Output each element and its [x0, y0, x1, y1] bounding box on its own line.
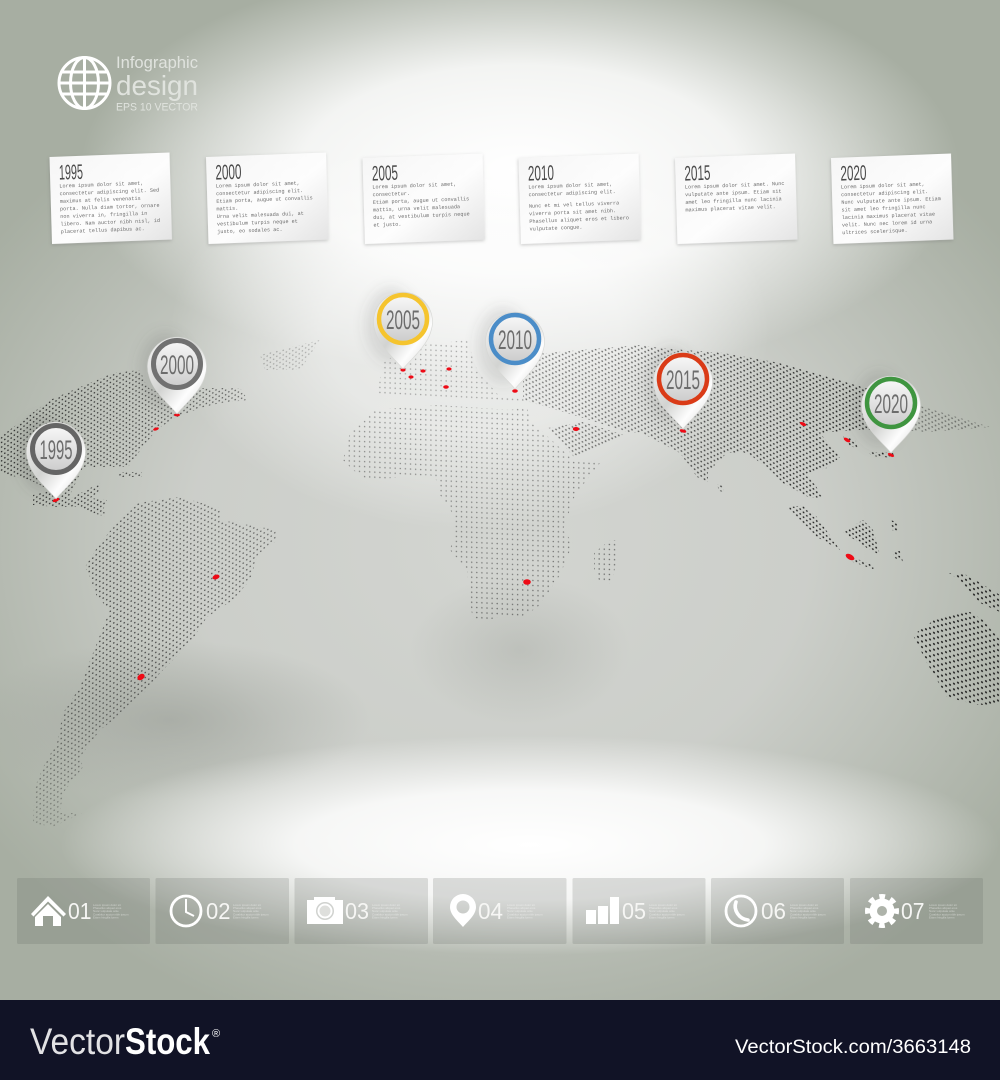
Oceania: [913, 573, 1000, 705]
note: 2005: mattis, urna velit malesuada: [373, 204, 460, 213]
note: 2020: ultrices scelerisque.: [842, 228, 908, 236]
icon: bar chart: [586, 897, 619, 924]
note: 2000: 2000: [215, 161, 242, 185]
logo text: Infographic: [116, 53, 198, 72]
tile 07: settings: Etiam fringilla lorem: [929, 915, 955, 919]
note: 2020: velit. Nunc nec lorem id urna: [842, 219, 932, 229]
map pins: [18, 287, 920, 499]
note: 2005: 2005: [372, 162, 398, 186]
tile 02: clock: Phasellus aliquet eros: [233, 906, 262, 910]
Far east Siberia: [912, 406, 990, 432]
note: 2000: Lorem ipsum dolor sit amet,: [216, 181, 300, 190]
note: 2010: Phasellus aliquet eros et libero: [529, 215, 629, 225]
pin: 1995: [18, 417, 86, 499]
Asia: [523, 345, 900, 498]
note: 1995: Lorem ipsum dolor sit amet,: [59, 181, 143, 190]
VectorStock logo: [30, 1021, 220, 1062]
note: 2010: vulputate congue.: [529, 225, 583, 233]
note: 2005: Lorem ipsum dolor sit amet,: [372, 182, 456, 191]
tile 03: camera: Lorem ipsum dolor sit: [372, 903, 400, 907]
Madagascar: [594, 540, 616, 580]
tile 06: phone: [711, 878, 844, 944]
note: 2005: et justo.: [373, 222, 402, 229]
tile 02: clock: Lorem ipsum dolor sit: [233, 903, 261, 907]
note: 2005: [362, 154, 485, 244]
pin: 1995: 1995: [40, 435, 72, 465]
Africa: [343, 405, 600, 620]
note: 2005: Etiam porta, augue ut convallis: [373, 196, 469, 206]
tile 03: camera: 03: [345, 898, 369, 924]
tile 06: phone: Lorem ipsum dolor sit: [790, 903, 818, 907]
tile 03: camera: Nunc vulputate ante: [372, 909, 398, 913]
South America: [33, 497, 277, 827]
pin: 2015: [645, 347, 712, 429]
note: 2000: justo, eo sodales ac.: [217, 227, 283, 235]
note: 1995: non viverra in, fringilla in: [60, 211, 147, 220]
timeline notes: [50, 152, 953, 244]
note: 2020: sit amet leo fringilla nunc: [841, 204, 926, 213]
logo text: design: [116, 70, 198, 101]
note: 2020: [831, 154, 953, 244]
note: 1995: libero. Nam auctor nibh nisl, id: [60, 218, 160, 228]
tile 06: phone: 06: [761, 898, 786, 924]
tile 05: bars: Phasellus aliquet eros: [649, 906, 678, 910]
note: 1995: placerat tellus dapibus ac.: [61, 226, 145, 235]
tile 04: location pin: Phasellus aliquet eros: [507, 906, 536, 910]
note: 2015: maximus placerat vitae velit.: [685, 204, 776, 213]
VectorStock logo: Vector: [30, 1021, 125, 1062]
footer watermark: [30, 1021, 971, 1062]
note: 2015: 2015: [684, 162, 711, 186]
pin: 2010: 2010: [498, 325, 532, 355]
tile 06: phone: Curabitur auctor nibh ipsum: [790, 912, 826, 916]
note: 1995: porta. Nulla diam tortor, ornare: [60, 203, 160, 212]
tile 02: clock: [156, 878, 289, 944]
note: 2000: mattis.: [216, 206, 238, 212]
note: 1995: maximus at felis venenatis: [60, 196, 141, 205]
tile 01: home: Nunc vulputate ante: [93, 909, 119, 913]
Europe: [377, 340, 525, 403]
location markers: [52, 367, 895, 682]
note: 2010: 2010: [528, 162, 554, 186]
tile 07: settings: Curabitur auctor nibh ipsum: [929, 912, 965, 916]
tile 01: home: [17, 878, 150, 944]
note: 2010: consectetur adipiscing elit.: [529, 189, 616, 198]
icon: camera: [307, 897, 343, 924]
note: 2015: [675, 154, 797, 244]
note: 2000: Urna velit malesuada dui, at: [217, 211, 304, 220]
tile 05: bars: 05: [622, 898, 646, 924]
North America: [0, 340, 320, 517]
note: 2020: 2020: [840, 162, 867, 186]
tile 07: settings: 07: [901, 898, 924, 924]
note: 2005: dui, at vestibulum turpis neque: [373, 211, 470, 221]
tile 01: home: Curabitur auctor nibh ipsum: [93, 912, 129, 916]
tile 01: home: Lorem ipsum dolor sit: [93, 903, 121, 907]
icon: clock: [171, 896, 201, 926]
Caribbean: [118, 472, 142, 477]
note: 2000: consectetur adipiscing elit.: [216, 188, 303, 197]
note: 2000: [206, 152, 329, 244]
pin: 2005: [365, 287, 432, 369]
icon: house: [31, 896, 66, 926]
pin: 2020: [853, 371, 920, 453]
dotted world map: [0, 340, 1000, 827]
pin: 2000: [139, 332, 206, 414]
tile 04: location pin: Nunc vulputate ante: [507, 909, 533, 913]
tile 02: clock: Curabitur auctor nibh ipsum: [233, 912, 269, 916]
image id: VectorStock.com/3663148: [735, 1037, 971, 1058]
bottom icon tiles: [17, 878, 983, 944]
note: 2020: Lorem ipsum dolor sit amet,: [841, 182, 925, 191]
note: 2020: lacinia maximus placerat vitae: [842, 212, 935, 221]
tile 04: location pin: Curabitur auctor nibh ipsum: [507, 912, 543, 916]
tile 05: bars: Curabitur auctor nibh ipsum: [649, 912, 685, 916]
icon: gear: [868, 897, 896, 925]
tile 07: settings: [850, 878, 983, 944]
tile 04: location pin: 04: [478, 898, 503, 924]
note: 2010: [518, 154, 641, 244]
tile 01: home: 01: [68, 898, 92, 924]
tile 01: home: Etiam fringilla lorem: [93, 915, 119, 919]
note: 1995: consectetur adipiscing elit. Sed: [60, 188, 159, 197]
note: 2000: Etiam porta, augue ut convallis: [216, 195, 313, 205]
pin: 2000: 2000: [160, 350, 194, 380]
Arabia: [548, 422, 624, 458]
note: 2000: vestibulum turpis neque et: [217, 219, 298, 228]
tile 03: camera: Phasellus aliquet eros: [372, 906, 401, 910]
tile 07: settings: Phasellus aliquet eros: [929, 906, 958, 910]
VectorStock logo: ®: [212, 1028, 220, 1040]
tile 07: settings: Lorem ipsum dolor sit: [929, 903, 957, 907]
note: 2015: Lorem ipsum dolor sit amet. Nunc: [685, 181, 785, 191]
tile 01: home: Phasellus aliquet eros: [93, 906, 122, 910]
VectorStock logo: Stock: [125, 1021, 210, 1062]
tile 03: camera: Etiam fringilla lorem: [372, 915, 398, 919]
note: 2020: consectetur adipiscing elit.: [841, 189, 928, 198]
tile 06: phone: Etiam fringilla lorem: [790, 915, 816, 919]
tile 02: clock: Etiam fringilla lorem: [233, 915, 259, 919]
logo text: [116, 53, 198, 114]
icon: globe: [58, 57, 110, 109]
Greenland: [260, 340, 320, 370]
tile 02: clock: Nunc vulputate ante: [233, 909, 259, 913]
icon: location pin: [450, 894, 476, 927]
tile 06: phone: Nunc vulputate ante: [790, 909, 816, 913]
note: 2020: Nunc vulputate ante ipsum. Etiam: [841, 196, 941, 206]
note: 1995: [50, 152, 172, 244]
tile 05: bars: Lorem ipsum dolor sit: [649, 903, 677, 907]
logo text: EPS 10 VECTOR: [116, 102, 198, 114]
tile 05: bars: [572, 878, 706, 944]
pin: 2005: 2005: [386, 305, 420, 335]
tile 03: camera: Curabitur auctor nibh ipsum: [372, 912, 408, 916]
icon: phone: [726, 896, 756, 926]
tile 07: settings: Nunc vulputate ante: [929, 909, 955, 913]
note: 2015: amet leo fringilla nunc lacinia: [685, 196, 782, 206]
tile 03: camera: [294, 878, 428, 944]
logo: [58, 53, 198, 114]
note: 1995: 1995: [59, 161, 83, 185]
note: 2010: viverra porta sit amet nibh.: [529, 208, 616, 217]
tile 05: bars: Nunc vulputate ante: [649, 909, 675, 913]
pin: 2015: 2015: [666, 365, 700, 395]
Japan and east islands: [843, 436, 858, 448]
note: 2010: Lorem ipsum dolor sit amet,: [528, 182, 612, 191]
tile 04: location pin: Lorem ipsum dolor sit: [507, 903, 535, 907]
note: 2015: vulputate ante ipsum. Etiam sit: [685, 189, 782, 198]
tile 04: location pin: Etiam fringilla lorem: [507, 915, 533, 919]
tile 06: phone: Phasellus aliquet eros: [790, 906, 819, 910]
tile 02: clock: 02: [206, 898, 230, 924]
tile 04: location pin: [433, 878, 566, 944]
note: 2010: Nunc et mi vel tellus viverra: [529, 200, 619, 210]
pin: 2020: 2020: [874, 389, 908, 419]
pin: 2010: [477, 307, 544, 389]
Sri Lanka and south-east Asia: [717, 484, 903, 569]
note: 2005: consectetur.: [373, 191, 410, 198]
tile 05: bars: Etiam fringilla lorem: [649, 915, 675, 919]
